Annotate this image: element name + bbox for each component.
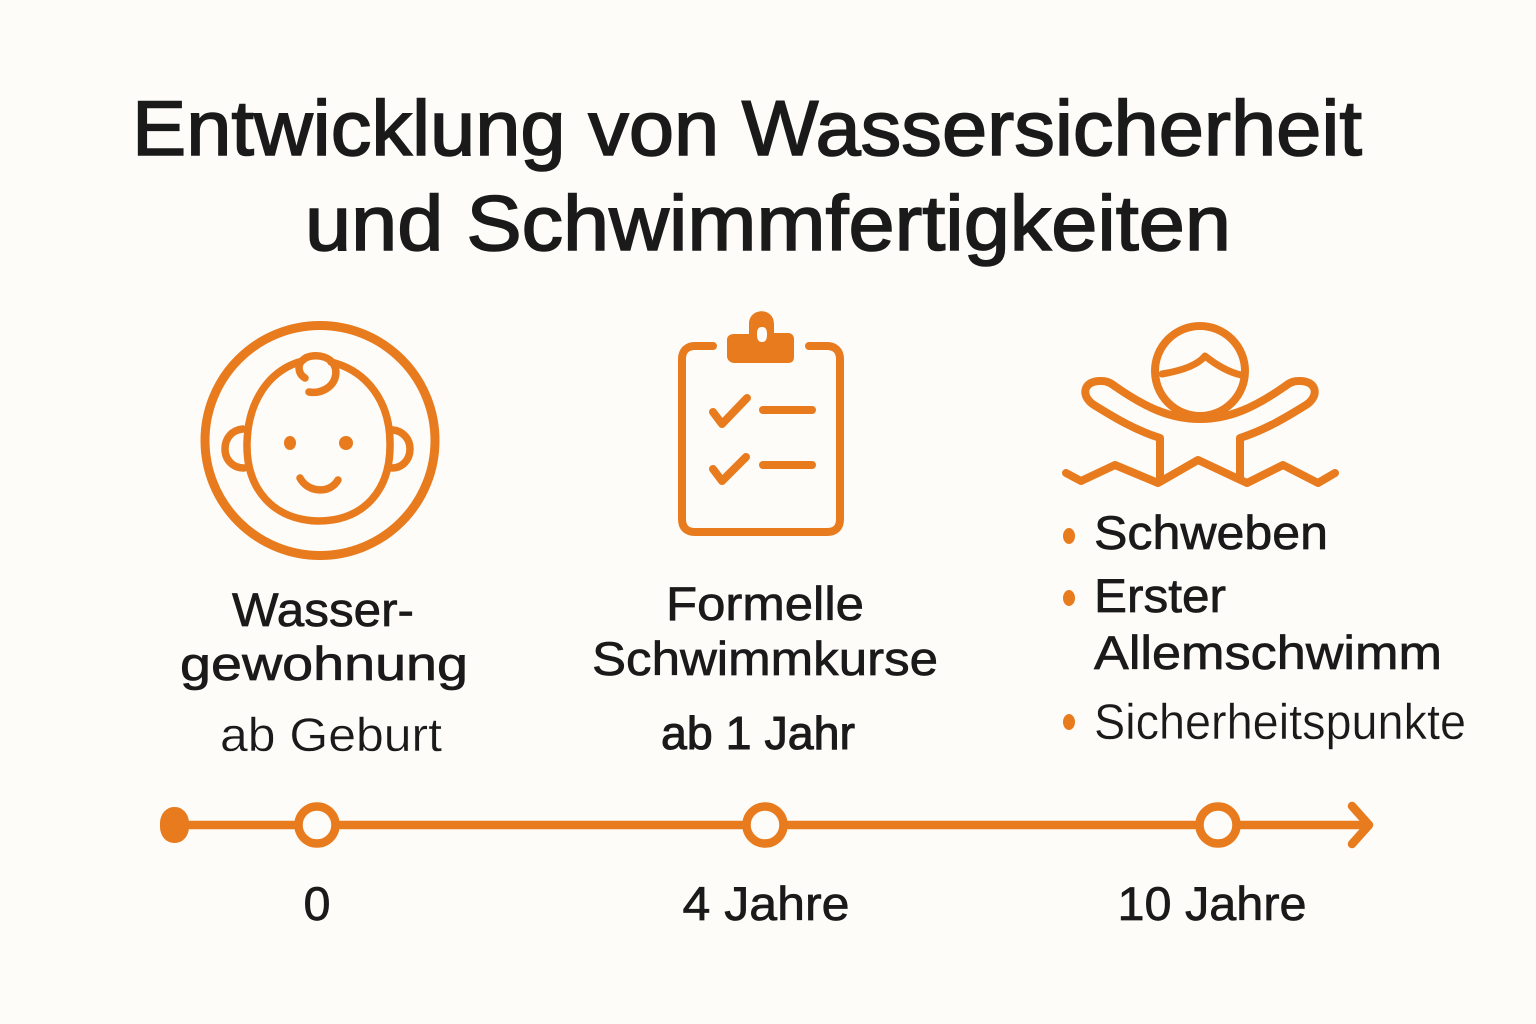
- text: water familiarisation: gewohnung: [180, 637, 468, 690]
- skill list: Erster: [1094, 569, 1226, 622]
- title: [132, 84, 1362, 267]
- icon: baby face: [205, 326, 435, 556]
- title: und Schwimmfertigkeiten: [305, 179, 1231, 267]
- timeline labels: 10 Jahre: [1118, 877, 1306, 930]
- text: formal swimming lessons: ab 1 Jahr: [661, 707, 855, 759]
- timeline labels: 4 Jahre: [682, 877, 850, 930]
- icon: swimmer: [1066, 326, 1335, 483]
- text: water familiarisation: Wasser-: [232, 583, 414, 636]
- text: water familiarisation: ab Geburt: [220, 708, 442, 761]
- timeline labels: [304, 877, 1306, 930]
- text: formal swimming lessons: Formelle: [666, 577, 864, 630]
- text: water familiarisation: [180, 583, 468, 761]
- icon: clipboard checklist: [682, 311, 840, 532]
- skill list: Schweben: [1094, 506, 1328, 559]
- skill list: Sicherheitspunkte: [1094, 694, 1466, 750]
- text: formal swimming lessons: [592, 577, 938, 759]
- skill list: [1063, 506, 1466, 750]
- title: Entwicklung von Wassersicherheit: [132, 84, 1362, 172]
- timeline arrow: [160, 806, 1369, 844]
- text: formal swimming lessons: Schwimmkurse: [592, 632, 938, 685]
- skill list: Allemschwimm: [1094, 626, 1442, 679]
- timeline labels: 0: [304, 877, 330, 930]
